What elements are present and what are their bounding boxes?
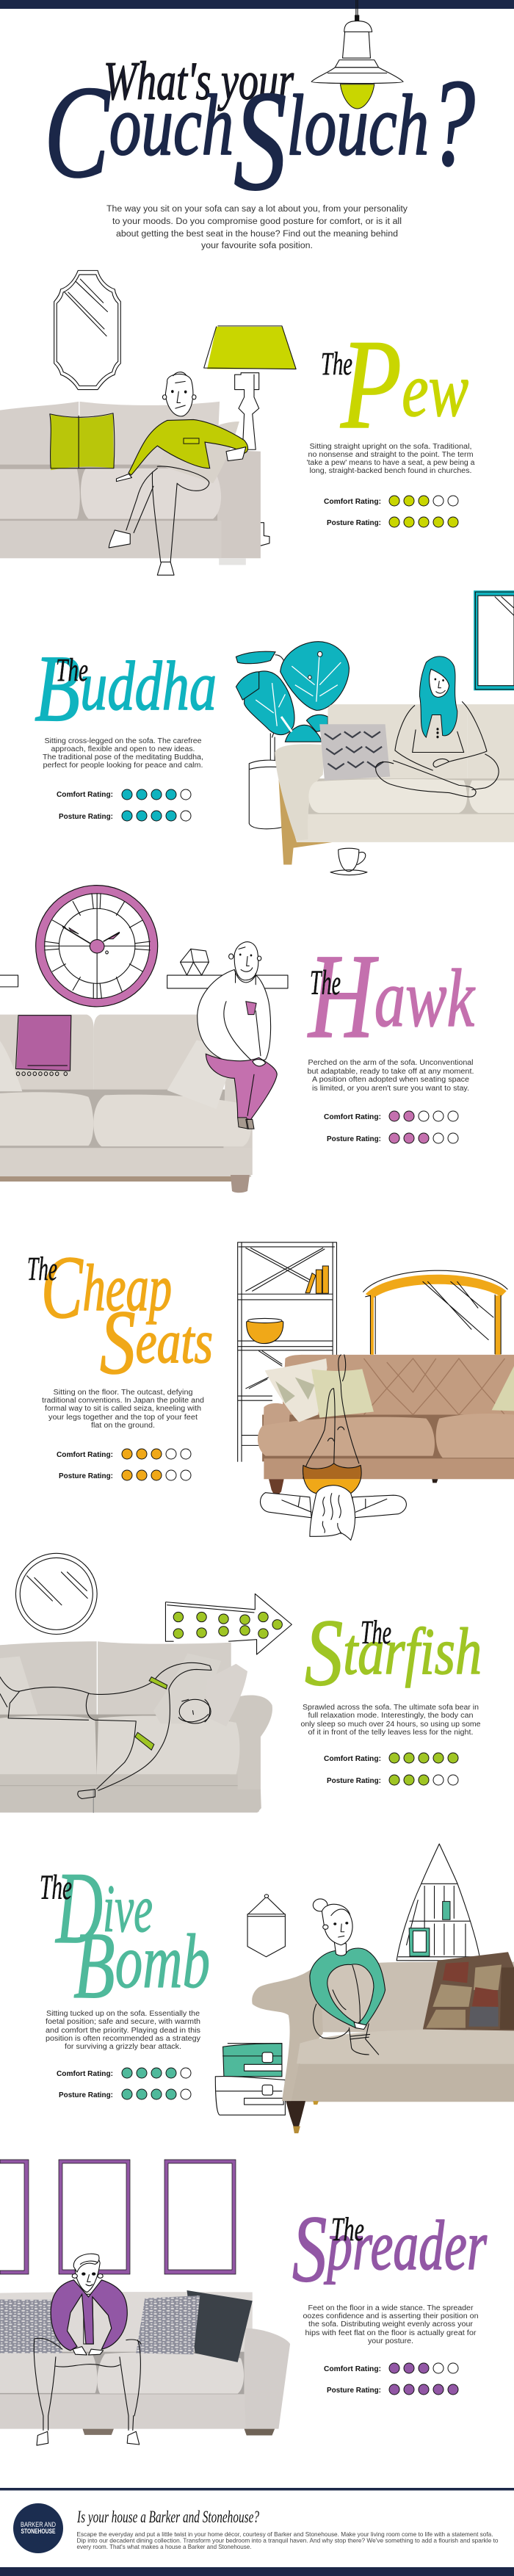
ratings: Comfort Rating: xyxy=(324,498,381,506)
ratings xyxy=(57,1449,191,1480)
description text: oozes confidence and is asserting their position on xyxy=(303,2312,479,2320)
pink throw xyxy=(15,1016,71,1076)
icon: floor lamp xyxy=(204,326,296,549)
panel: the spreader xyxy=(0,2160,487,2445)
intro text: to your moods. Do you compromise good posture for comfort, or is it all xyxy=(112,217,402,226)
title: louch xyxy=(286,77,429,173)
title xyxy=(44,51,475,220)
ratings xyxy=(57,789,191,821)
icon: picture frame xyxy=(474,590,514,690)
description text: foetal position; safe and secure, with warmth xyxy=(46,2018,200,2026)
description text: full relaxation mode. Interestingly, the body can xyxy=(308,1712,473,1720)
ratings: Posture Rating: xyxy=(327,1777,381,1785)
ratings xyxy=(324,2363,458,2395)
heading: the pew: P xyxy=(340,313,402,455)
description text: Feet on the floor in a wide stance. The spreader xyxy=(308,2304,474,2312)
heading: the hawk xyxy=(307,929,476,1063)
heading: the hawk: H xyxy=(307,929,379,1063)
heading: the dive bomb: ive xyxy=(103,1871,153,1946)
title: S xyxy=(234,62,286,220)
heading: the hawk: awk xyxy=(374,953,476,1044)
heading: the cheap seats: The xyxy=(27,1250,57,1287)
description text xyxy=(43,737,203,770)
description text: your posture. xyxy=(368,2337,413,2345)
description text: formal way to sit is called seiza, kneeling with xyxy=(45,1405,201,1413)
description text: approach, flexible and open to new ideas. xyxy=(51,745,195,753)
description text: Sitting tucked up on the sofa. Essentially the xyxy=(46,2010,200,2018)
heading: the buddha: B xyxy=(35,636,80,742)
dive bomb sofa xyxy=(252,1952,514,2133)
arrow with light bulbs xyxy=(165,1593,292,1654)
title: ? xyxy=(429,54,475,192)
description text: no nonsense and straight to the point. The term xyxy=(308,451,473,459)
man perched on sofa arm xyxy=(198,942,277,1129)
intro text: your favourite sofa position. xyxy=(201,242,313,250)
icon: shelving unit xyxy=(238,1242,336,1461)
description text: your legs together and the top of your feet xyxy=(48,1414,198,1422)
heading: the starfish: The xyxy=(361,1613,391,1651)
heading: the starfish: S xyxy=(305,1600,343,1706)
description text: Sprawled across the sofa. The ultimate sofa bear in xyxy=(303,1704,479,1712)
logo: STONEHOUSE xyxy=(21,2528,56,2535)
ratings: Posture Rating: xyxy=(59,813,113,821)
ratings: Comfort Rating: xyxy=(57,1451,113,1459)
ratings: Comfort Rating: xyxy=(324,1755,381,1763)
icon: arched mirror xyxy=(363,1270,507,1355)
description text xyxy=(301,1704,481,1737)
description text: traditional conventions. In Japan the polite and xyxy=(42,1397,204,1405)
logo xyxy=(13,2503,63,2553)
illustration: spreader sofa scene xyxy=(0,2254,290,2445)
ratings: Posture Rating: xyxy=(327,519,381,527)
heading: the spreader: The xyxy=(331,2210,364,2248)
icon: stacked suitcases xyxy=(215,2044,285,2115)
ratings xyxy=(324,1753,458,1785)
panel: the buddha xyxy=(35,590,514,875)
description text: 'take a pew' means to have a seat, a pew being a xyxy=(307,459,475,467)
top navy bar xyxy=(0,0,514,9)
icon: hanging ceiling lamp xyxy=(311,0,403,109)
ratings xyxy=(57,2068,191,2099)
description text xyxy=(46,2010,200,2051)
description text: flat on the ground. xyxy=(91,1422,155,1430)
description text: The traditional pose of the meditating Buddha, xyxy=(43,753,203,761)
heading: the dive bomb xyxy=(40,1851,210,2019)
lime cushion xyxy=(50,413,115,470)
description text: is limited, or you aren't sure you want to stay. xyxy=(312,1085,469,1093)
intro text: about getting the best seat in the house? Find out the meaning behind xyxy=(116,230,398,239)
panel: the starfish xyxy=(0,1553,482,1812)
patterned cushion xyxy=(319,724,390,781)
icon: monstera plant xyxy=(236,642,349,761)
title: What's your xyxy=(104,51,294,112)
heading: the pew xyxy=(321,313,468,455)
description text xyxy=(307,443,475,475)
description text: only sleep so much over 24 hours, so using up some xyxy=(301,1721,481,1729)
ratings: Posture Rating: xyxy=(59,1472,113,1480)
heading: the cheap seats: C xyxy=(41,1238,84,1337)
description text xyxy=(303,2304,479,2345)
title: C xyxy=(44,59,110,205)
man with wide stance xyxy=(34,2254,141,2445)
ratings: Comfort Rating: xyxy=(324,2365,381,2373)
leather sofa xyxy=(258,1355,514,1497)
description text: Perched on the arm of the sofa. Unconventional xyxy=(308,1059,473,1067)
panel: the pew xyxy=(0,270,475,575)
title: ouch xyxy=(109,77,234,173)
footer text: Dip into our decadent dining collection. Transform your bedroom into a tranquil haven. And why stop there? We've something to add a flourish and sparkle to xyxy=(76,2536,499,2544)
footer heading: Is your house a Barker and Stonehouse? xyxy=(76,2508,259,2526)
logo: BARKER AND xyxy=(21,2521,56,2528)
description text xyxy=(307,1059,474,1093)
shelves and gem xyxy=(0,949,288,988)
heading: the buddha: The xyxy=(56,652,88,688)
heading: the pew: ew xyxy=(402,347,468,433)
panel: the cheap seats xyxy=(27,1238,514,1540)
icon: wall clock xyxy=(36,886,158,1007)
heading: the cheap seats: eats xyxy=(136,1308,213,1376)
heading: the spreader: S xyxy=(292,2196,327,2302)
woman sitting cross-legged xyxy=(376,656,499,797)
illustration: starfish sofa scene xyxy=(0,1553,292,1812)
illustration: dive bomb sofa scene xyxy=(215,1844,514,2133)
footer text xyxy=(76,2530,499,2550)
hawk sofa xyxy=(0,1015,253,1175)
heading: the spreader xyxy=(292,2196,487,2302)
ratings: Posture Rating: xyxy=(327,2387,381,2395)
heading: the dive bomb: omb xyxy=(115,1918,210,2004)
description text: hips with feet flat on the floor is actually great for xyxy=(305,2329,477,2337)
heading: the cheap seats xyxy=(27,1238,213,1394)
footer text: every room. That's what makes a house a Barker and Stonehouse. xyxy=(76,2543,251,2550)
icon: hanging pennant xyxy=(247,1895,285,1957)
starfish sofa xyxy=(0,1641,272,1812)
footer text: Escape the everyday and put a little twist in your home décor, courtesy of Barker and Stonehouse. Make your living room come to life with a statement sofa. xyxy=(76,2530,493,2538)
description text: long, straight-backed bench found in churches. xyxy=(310,467,471,475)
ratings: Comfort Rating: xyxy=(57,2070,113,2078)
icon: wall mirror xyxy=(54,270,120,390)
icon: tea cup xyxy=(330,848,367,875)
heading: the cheap seats: heap xyxy=(83,1252,172,1325)
ratings: Comfort Rating: xyxy=(57,791,113,799)
heading: the starfish: tarfish xyxy=(343,1616,482,1688)
icon: three wall frames xyxy=(0,2160,236,2274)
description text: position is often recommended as a strategy xyxy=(46,2035,200,2043)
hawk sofa lower base xyxy=(0,1175,251,1193)
woman with legs up on sofa xyxy=(260,1355,406,1540)
illustration: buddha sofa scene xyxy=(236,590,514,875)
person sprawled across sofa xyxy=(0,1663,211,1798)
description text: Sitting on the floor. The outcast, defying xyxy=(53,1389,192,1397)
description text: of it in front of the telly leaves less for the night. xyxy=(308,1729,473,1737)
ratings: Posture Rating: xyxy=(59,2091,113,2099)
heading: the pew: The xyxy=(321,346,352,382)
heading: the buddha: uddha xyxy=(80,647,217,725)
icon: plant pot xyxy=(249,760,282,829)
heading: the dive bomb: D xyxy=(55,1851,103,1965)
illustration: pew sofa scene xyxy=(0,270,296,575)
description text: the sofa. Distributing weight evenly across your xyxy=(308,2320,474,2329)
ratings: Comfort Rating: xyxy=(324,1113,381,1121)
heading: the cheap seats: S xyxy=(100,1292,136,1394)
intro text xyxy=(106,205,408,250)
description text: for surviving a grizzly bear attack. xyxy=(65,2043,181,2051)
spreader sofa xyxy=(0,2290,290,2436)
footer panel xyxy=(0,2488,514,2576)
description text: Sitting straight upright on the sofa. Traditional, xyxy=(310,443,471,451)
intro text: The way you sit on your sofa can say a lot about you, from your personality xyxy=(106,205,408,214)
ratings xyxy=(324,1111,458,1143)
heading: the starfish xyxy=(305,1600,482,1706)
heading: the dive bomb: The xyxy=(40,1868,72,1907)
ratings xyxy=(324,496,458,527)
icon: triangular shelf xyxy=(397,1844,480,1961)
ratings: Posture Rating: xyxy=(327,1135,381,1143)
panel: the dive bomb xyxy=(40,1844,514,2133)
description text: and comfort the priority. Playing dead in this xyxy=(46,2027,200,2035)
heading: the dive bomb: B xyxy=(73,1913,115,2019)
description text: but adaptable, ready to take off at any moment. xyxy=(307,1068,474,1076)
illustration: cheap seats sofa scene xyxy=(238,1242,514,1540)
icon: round mirror xyxy=(15,1553,97,1635)
heading: the buddha xyxy=(35,636,217,742)
description text xyxy=(42,1389,204,1430)
illustration: hawk sofa scene xyxy=(0,886,288,1175)
pew sofa xyxy=(0,402,261,565)
description text: perfect for people looking for peace and calm. xyxy=(43,761,203,770)
buddha sofa xyxy=(275,704,514,865)
woman tucked up on sofa xyxy=(310,1899,386,2055)
description text: Sitting cross-legged on the sofa. The carefree xyxy=(44,737,202,745)
man sitting upright xyxy=(109,372,248,575)
panel: the hawk xyxy=(0,886,476,1193)
heading: the hawk: The xyxy=(310,963,341,1002)
description text: A position often adopted when seating space xyxy=(312,1076,469,1084)
